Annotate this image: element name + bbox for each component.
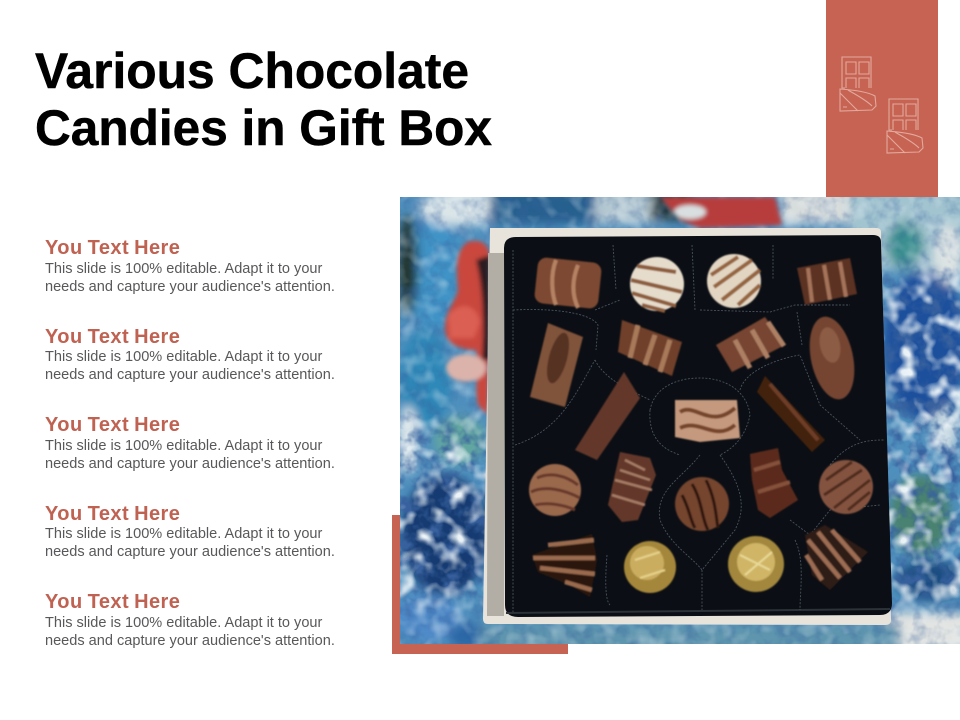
text block 4 (45, 503, 335, 560)
text block 3: needs and capture your audience's attention. (45, 456, 335, 472)
text block 1: This slide is 100% editable. Adapt it to your (45, 261, 322, 277)
text block 4: needs and capture your audience's attention. (45, 544, 335, 560)
text block 2: needs and capture your audience's attention. (45, 367, 335, 383)
text block 2: You Text Here (45, 326, 180, 348)
text block 3: This slide is 100% editable. Adapt it to your (45, 438, 322, 454)
icon: chocolate bars (840, 56, 924, 154)
text block 5: needs and capture your audience's attention. (45, 633, 335, 649)
chocolate row 3 (575, 372, 825, 460)
text block 5: You Text Here (45, 591, 180, 613)
title (35, 43, 492, 156)
text block 5: This slide is 100% editable. Adapt it to your (45, 615, 322, 631)
chocolate row 1 (534, 254, 857, 311)
text block 5 (45, 591, 335, 649)
gift box (483, 228, 892, 625)
panel: top-right accent with chocolate icons (826, 0, 938, 197)
title: Candies in Gift Box (35, 100, 492, 156)
text block 4: This slide is 100% editable. Adapt it to your (45, 526, 322, 542)
chocolate row 4 (529, 448, 873, 531)
photo: chocolates in gift box (400, 197, 960, 644)
text block 1: needs and capture your audience's attention. (45, 279, 335, 295)
fabric background (396, 190, 960, 652)
text block 3: You Text Here (45, 414, 180, 436)
text list (45, 237, 335, 649)
text block 1 (45, 237, 335, 295)
title: Various Chocolate (35, 43, 469, 99)
tray dividers (513, 245, 885, 612)
panel: lower-left accent block behind photo (392, 515, 568, 654)
chocolates (529, 254, 873, 597)
text block 2: This slide is 100% editable. Adapt it to your (45, 349, 322, 365)
text block 1: You Text Here (45, 237, 180, 259)
chocolate row 5 (532, 525, 868, 597)
text block 2 (45, 326, 335, 383)
chocolate row 2 (530, 313, 861, 407)
text block 3 (45, 414, 335, 472)
text block 4: You Text Here (45, 503, 180, 525)
